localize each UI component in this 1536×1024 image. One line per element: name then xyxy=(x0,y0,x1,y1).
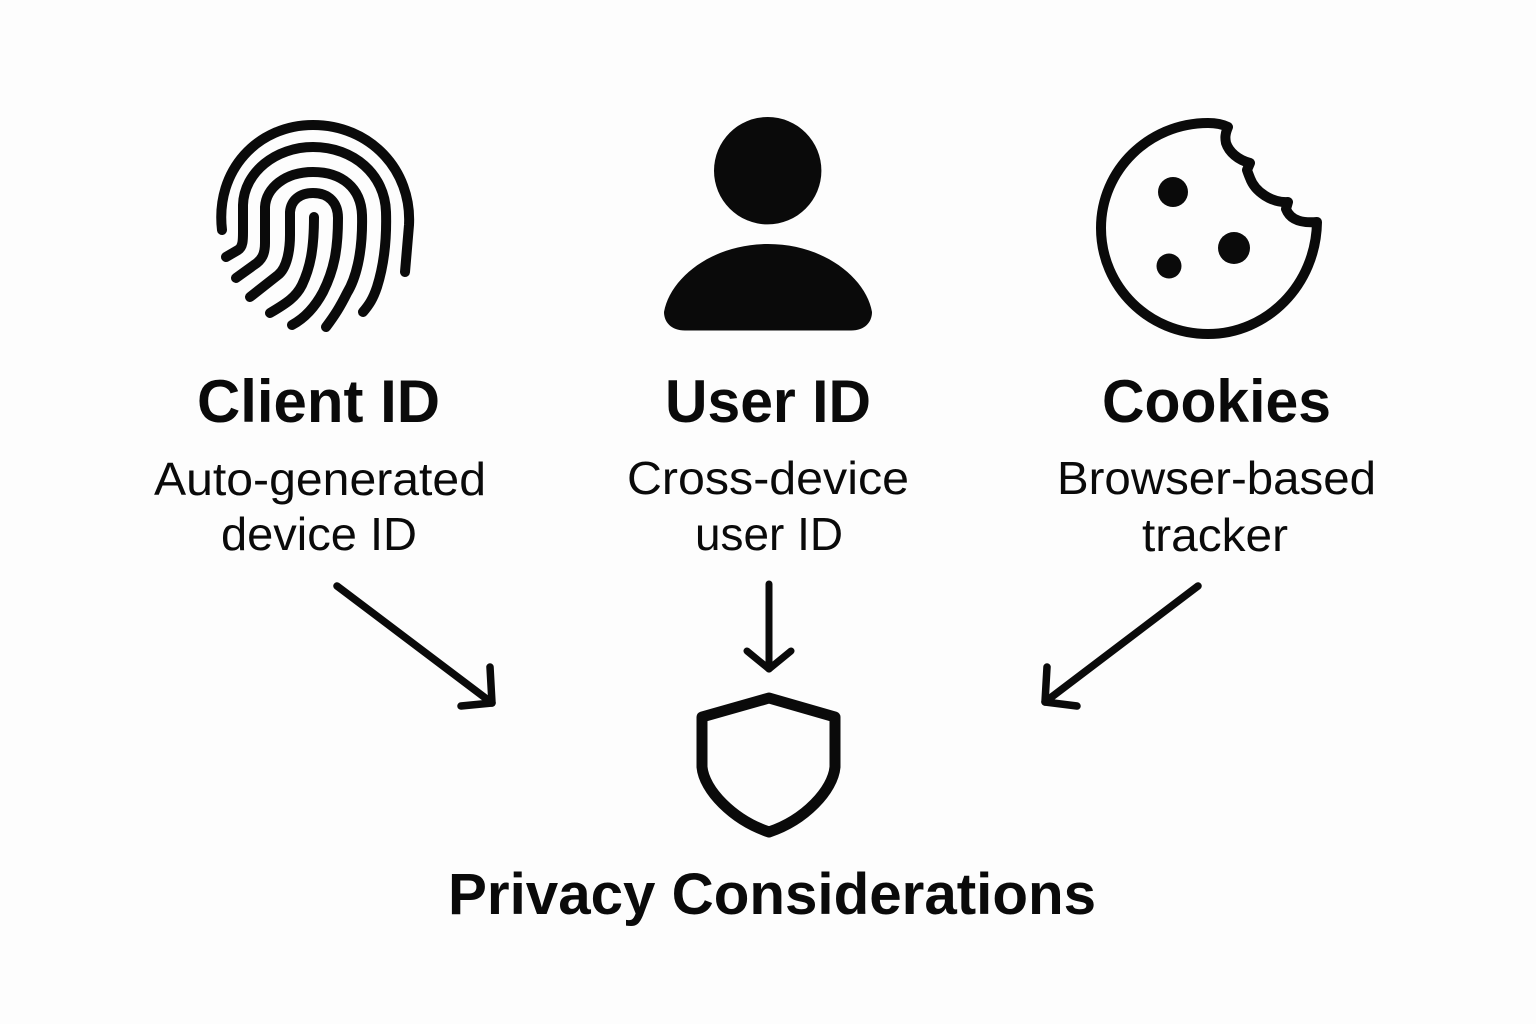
icon: user xyxy=(664,117,872,330)
icon: fingerprint xyxy=(221,125,409,327)
heading: Client ID: Client ID xyxy=(197,368,440,435)
icon: shield xyxy=(702,698,835,832)
description: Cookies: tracker xyxy=(1142,509,1288,561)
heading: Privacy Considerations: Privacy Considerations xyxy=(448,862,1096,927)
description: User ID: user ID xyxy=(695,508,843,560)
description: Cookies: Browser-based xyxy=(1057,452,1376,504)
panel: Client ID xyxy=(154,125,486,560)
description: Client ID xyxy=(154,453,486,560)
description: User ID: Cross-device xyxy=(627,452,909,504)
arrow: User ID to Privacy xyxy=(747,584,791,669)
icon: cookie xyxy=(1101,123,1317,334)
description: Client ID: device ID xyxy=(221,508,417,560)
heading: Cookies: Cookies xyxy=(1102,368,1331,435)
description: Client ID: Auto-generated xyxy=(154,453,486,505)
heading: User ID: User ID xyxy=(665,368,871,435)
description: User ID xyxy=(627,452,909,560)
description: Cookies xyxy=(1057,452,1376,561)
arrow: Cookies to Privacy xyxy=(1045,586,1198,706)
panel: User ID xyxy=(627,117,909,560)
arrow: Client ID to Privacy xyxy=(337,586,492,706)
panel: Cookies xyxy=(1057,123,1376,561)
